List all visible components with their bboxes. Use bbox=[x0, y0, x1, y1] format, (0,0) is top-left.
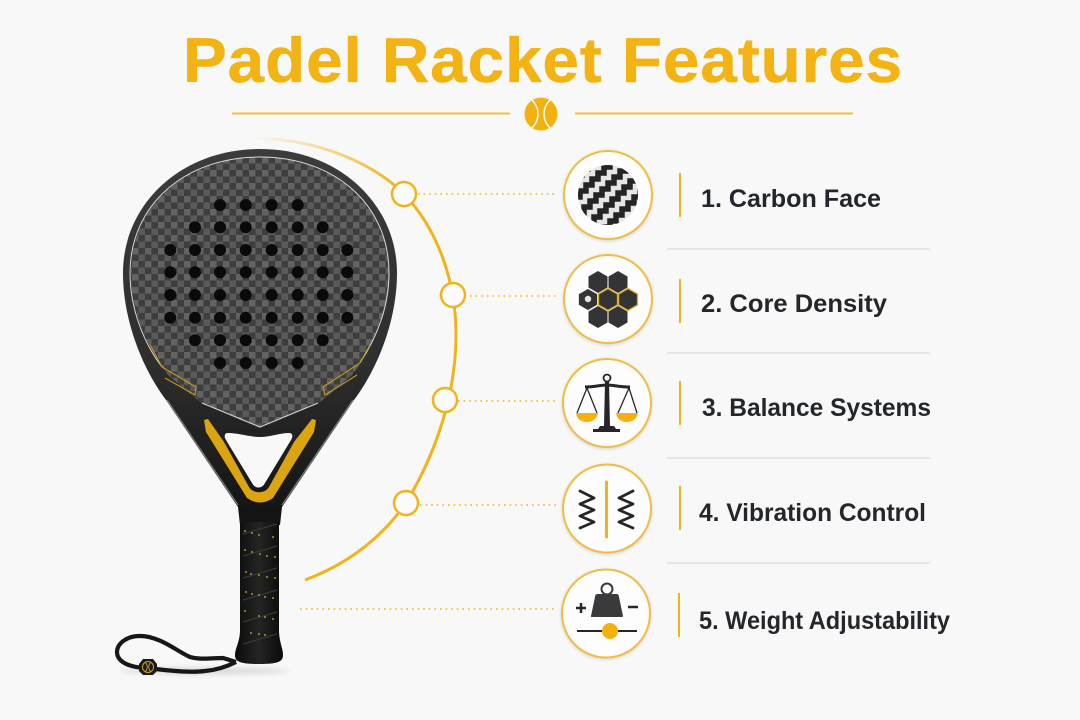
icon: honeycomb bbox=[564, 255, 652, 343]
frame edge highlight bbox=[167, 400, 353, 505]
connector nodes and dotted leaders bbox=[300, 182, 556, 609]
connector arc lower bbox=[305, 194, 456, 580]
row 5: weight adjustability bbox=[562, 570, 950, 658]
label: weight adjustability: 5. Weight Adjustability bbox=[699, 607, 950, 635]
racket bbox=[117, 149, 397, 675]
icon: carbon weave bbox=[562, 150, 654, 242]
label: balance systems: 3. Balance Systems bbox=[702, 394, 931, 422]
face rim line bbox=[130, 157, 389, 427]
grip stitching bbox=[244, 530, 276, 636]
grip wrap lines bbox=[243, 524, 277, 644]
icon: springs bbox=[563, 464, 651, 552]
carbon face bbox=[131, 157, 389, 428]
title: Padel Racket Features bbox=[183, 26, 903, 96]
handle collar bbox=[238, 507, 282, 525]
row 1: carbon face bbox=[562, 150, 880, 242]
title divider with ball icon bbox=[232, 98, 853, 130]
icon: balance scale bbox=[563, 359, 651, 447]
label: carbon face: 1. Carbon Face bbox=[701, 185, 881, 213]
holes bbox=[164, 199, 353, 369]
label: core density: 2. Core Density bbox=[701, 290, 887, 318]
row 4: vibration control bbox=[563, 464, 926, 552]
racket frame bbox=[123, 149, 397, 507]
lanyard tag bbox=[139, 659, 157, 675]
row 2: core density bbox=[564, 255, 887, 343]
icon: weight slider bbox=[562, 570, 650, 658]
label: vibration control: 4. Vibration Control bbox=[699, 499, 926, 527]
gold face accents bbox=[150, 345, 370, 395]
ground shadow bbox=[120, 668, 290, 674]
lanyard bbox=[117, 636, 236, 672]
row 3: balance systems bbox=[563, 359, 931, 447]
connector arc bbox=[250, 138, 404, 194]
yellow throat bbox=[204, 419, 316, 502]
grip bbox=[235, 522, 283, 664]
